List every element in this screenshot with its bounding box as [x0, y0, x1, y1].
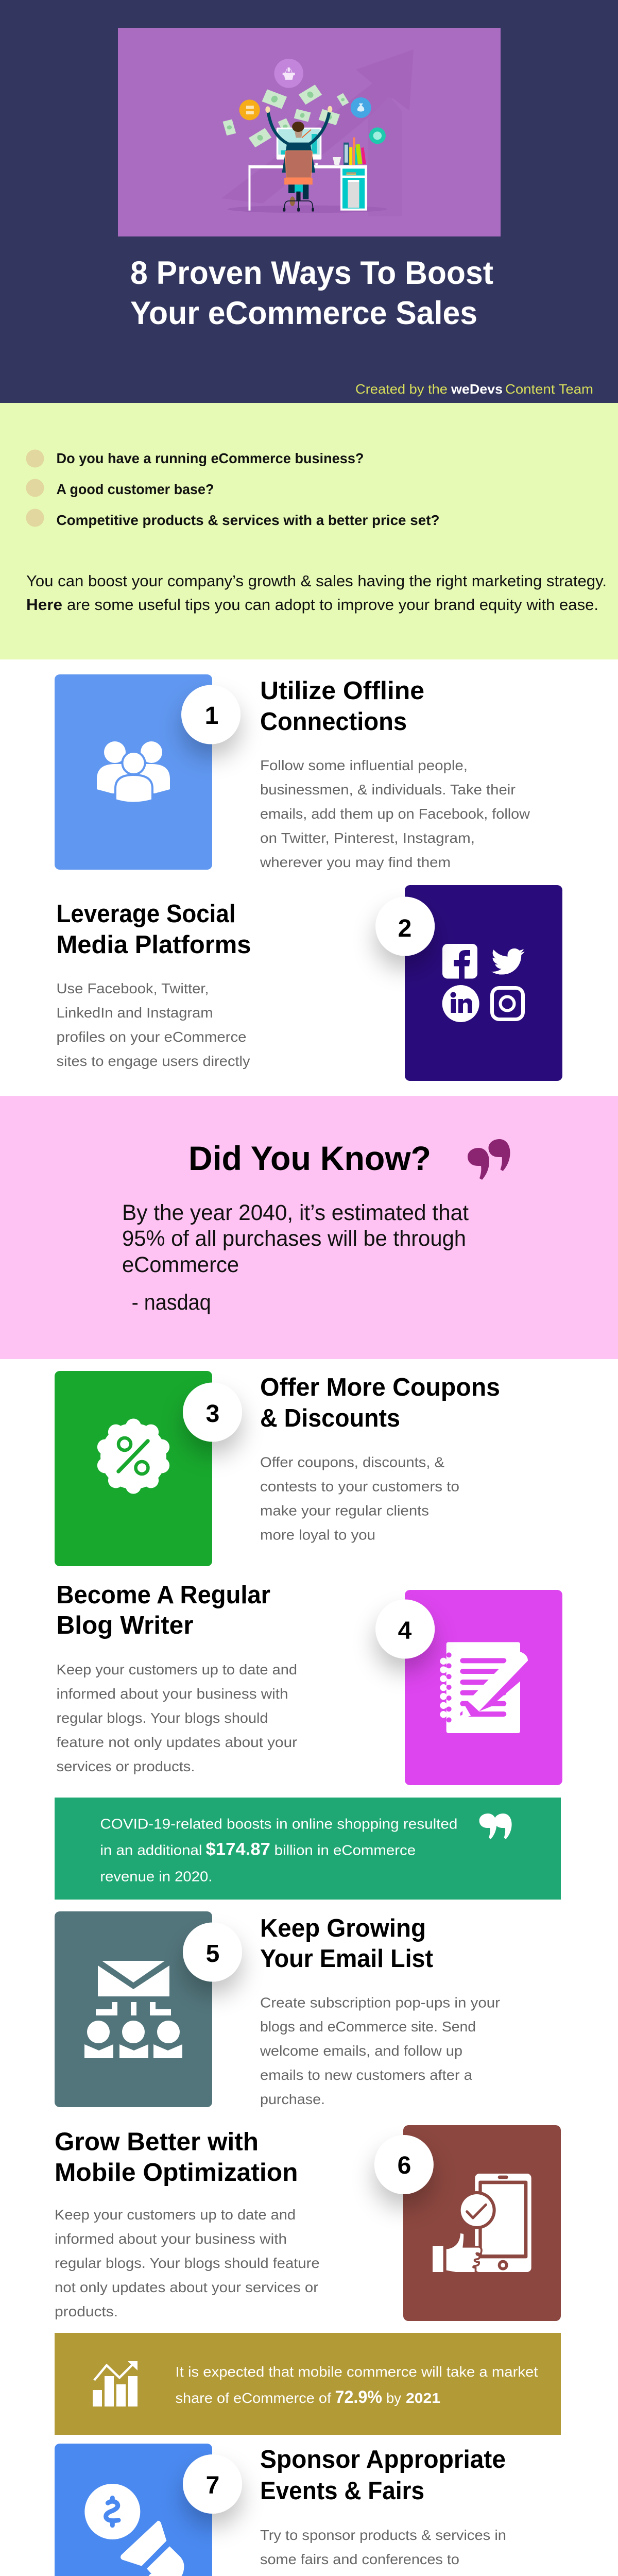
bills — [262, 89, 287, 109]
body text: regular blogs. Your blogs should — [57, 1710, 268, 1726]
panel: did you know — [0, 1096, 618, 1359]
cup and books — [333, 157, 341, 165]
body text: blogs and eCommerce site. Send — [260, 2019, 476, 2035]
body text: regular blogs. Your blogs should feature — [55, 2255, 320, 2271]
heading — [260, 2446, 506, 2505]
heading: & Discounts — [260, 1404, 400, 1432]
body text: businessmen, & individuals. Take their — [260, 782, 516, 798]
credit line — [355, 381, 593, 397]
body text: on Twitter, Pinterest, Instagram, — [260, 830, 475, 846]
body text: purchase. — [260, 2091, 325, 2107]
monitor — [277, 128, 321, 160]
heading: Mobile Optimization — [55, 2159, 298, 2187]
panel: step 2 — [57, 885, 562, 1081]
heading: Grow Better with — [55, 2128, 259, 2156]
body text — [260, 1454, 459, 1543]
callout text: in an additional — [100, 1842, 202, 1858]
number badge 1: 1 — [205, 702, 218, 730]
panel: header — [0, 0, 618, 403]
callout text: It is expected that mobile commerce will take a market — [175, 2364, 538, 2380]
number badge 6: 6 — [398, 2152, 411, 2179]
intro paragraph — [26, 572, 607, 614]
callout text: revenue in 2020. — [100, 1868, 212, 1885]
heading: Leverage Social — [57, 900, 236, 928]
fact text: 95% of all purchases will be through — [122, 1226, 466, 1251]
body text: Follow some influential people, — [260, 757, 468, 773]
heading — [260, 1914, 433, 1973]
body text: Keep your customers up to date and — [55, 2207, 296, 2223]
body text: sites to engage users directly — [57, 1053, 250, 1069]
heading: Sponsor Appropriate — [260, 2446, 506, 2473]
body text: not only updates about your services or — [55, 2279, 318, 2295]
number badge 1 — [181, 685, 241, 744]
body text: profiles on your eCommerce — [57, 1029, 246, 1045]
heading — [57, 900, 251, 959]
callout text: 2021 — [406, 2390, 440, 2406]
callout: covid stat — [55, 1798, 561, 1900]
number badge 4: 4 — [398, 1617, 412, 1645]
title: 8 Proven Ways To Boost — [130, 255, 493, 291]
body text: Offer coupons, discounts, & — [260, 1454, 444, 1470]
callout text — [175, 2364, 538, 2407]
credit line: Content Team — [505, 381, 593, 397]
panel: step 6 — [55, 2125, 561, 2321]
hero illustration — [118, 28, 501, 236]
heading: Blog Writer — [57, 1612, 194, 1639]
intro paragraph: You can boost your company’s growth & sales having the right marketing strategy. — [26, 572, 607, 590]
heading: Utilize Offline — [260, 677, 424, 705]
body text: informed about your business with — [55, 2231, 287, 2247]
number badge 3: 3 — [206, 1400, 219, 1428]
heading: Become A Regular — [57, 1581, 270, 1609]
icon card: sponsor megaphone — [55, 2444, 212, 2576]
heading: Your Email List — [260, 1945, 433, 1973]
callout text: $174.87 — [206, 1839, 270, 1859]
body text: informed about your business with — [57, 1686, 288, 1702]
body text: products. — [55, 2303, 118, 2319]
callout text — [100, 1816, 457, 1885]
body text — [260, 2527, 508, 2576]
fact text: - nasdaq — [132, 1290, 211, 1315]
body text: services or products. — [57, 1758, 195, 1774]
bullet questions — [26, 449, 440, 528]
heading: Media Platforms — [57, 931, 251, 959]
body text: LinkedIn and Instagram — [57, 1005, 213, 1021]
number badge 3 — [183, 1383, 242, 1442]
callout text: COVID-19-related boosts in online shopping resulted — [100, 1816, 457, 1832]
body text — [57, 980, 250, 1069]
number badge 2: 2 — [398, 915, 411, 942]
fact text — [122, 1200, 469, 1315]
body text: emails, add them up on Facebook, follow — [260, 806, 530, 822]
icon: quote mark — [479, 1814, 512, 1839]
callout text: by — [386, 2390, 401, 2406]
number badge 4 — [375, 1599, 435, 1659]
body text: make your regular clients — [260, 1502, 429, 1519]
icon card: discount badge — [55, 1371, 212, 1566]
icon card: notebook — [405, 1590, 562, 1785]
number badge 2 — [375, 896, 435, 956]
number badge 5: 5 — [206, 1940, 219, 1968]
body text — [57, 1662, 297, 1774]
fact text: eCommerce — [122, 1252, 239, 1277]
number badge 7: 7 — [206, 2472, 219, 2499]
body text — [260, 757, 530, 870]
heading: Keep Growing — [260, 1914, 426, 1942]
body text: Use Facebook, Twitter, — [57, 980, 209, 996]
body text: wherever you may find them — [260, 854, 451, 870]
heading — [260, 677, 424, 736]
bullet questions: A good customer base? — [57, 481, 214, 497]
callout text: 72.9% — [335, 2387, 382, 2407]
body text: Create subscription pop-ups in your — [260, 1994, 500, 2010]
desk — [248, 165, 367, 168]
panel: step 3 — [55, 1371, 500, 1566]
heading — [55, 2128, 298, 2187]
number badge 7 — [183, 2454, 242, 2514]
bullet questions: Do you have a running eCommerce business? — [57, 450, 364, 466]
heading: Offer More Coupons — [260, 1374, 500, 1401]
body text: feature not only updates about your — [57, 1734, 297, 1750]
heading — [260, 1374, 500, 1432]
body text — [260, 1994, 500, 2107]
heading — [57, 1581, 270, 1639]
body text: some fairs and conferences to — [260, 2551, 459, 2567]
credit line: weDevs — [451, 381, 503, 397]
panel: step 1 — [55, 674, 530, 870]
body text — [55, 2207, 320, 2319]
intro paragraph: are some useful tips you can adopt to improve your brand equity with ease. — [67, 596, 598, 614]
title — [130, 255, 493, 331]
body text: contests to your customers to — [260, 1479, 459, 1494]
panel: step 4 — [57, 1581, 562, 1785]
heading: Did You Know? — [188, 1139, 431, 1177]
panel: step 7 — [55, 2444, 508, 2576]
body text: Try to sponsor products & services in — [260, 2527, 506, 2543]
credit line: Created by the — [355, 381, 448, 397]
panel: intro — [0, 403, 618, 659]
callout: mobile commerce stat — [55, 2333, 561, 2435]
callout text: billion in eCommerce — [274, 1842, 416, 1858]
fact text: By the year 2040, it’s estimated that — [122, 1200, 469, 1225]
intro paragraph: Here — [26, 596, 62, 614]
body text: Keep your customers up to date and — [57, 1662, 297, 1677]
body text: emails to new customers after a — [260, 2067, 472, 2083]
number badge 5 — [183, 1923, 242, 1981]
panel: step 5 — [55, 1911, 500, 2107]
heading: Events & Fairs — [260, 2477, 424, 2505]
icon card: mobile check — [403, 2125, 561, 2321]
body text: welcome emails, and follow up — [260, 2043, 462, 2059]
heading: Connections — [260, 708, 407, 736]
bullet questions: Competitive products & services with a better price set? — [57, 512, 440, 528]
person — [268, 112, 329, 144]
icon card: social media — [405, 885, 562, 1081]
icon: quote mark — [468, 1139, 510, 1180]
body text: more loyal to you — [260, 1527, 375, 1543]
title: Your eCommerce Sales — [130, 295, 477, 331]
icon: growth chart — [93, 2361, 138, 2406]
icon card: email list — [55, 1911, 212, 2107]
callout text: share of eCommerce of — [175, 2390, 331, 2406]
number badge 6 — [374, 2135, 434, 2194]
icon card: people — [55, 674, 212, 870]
